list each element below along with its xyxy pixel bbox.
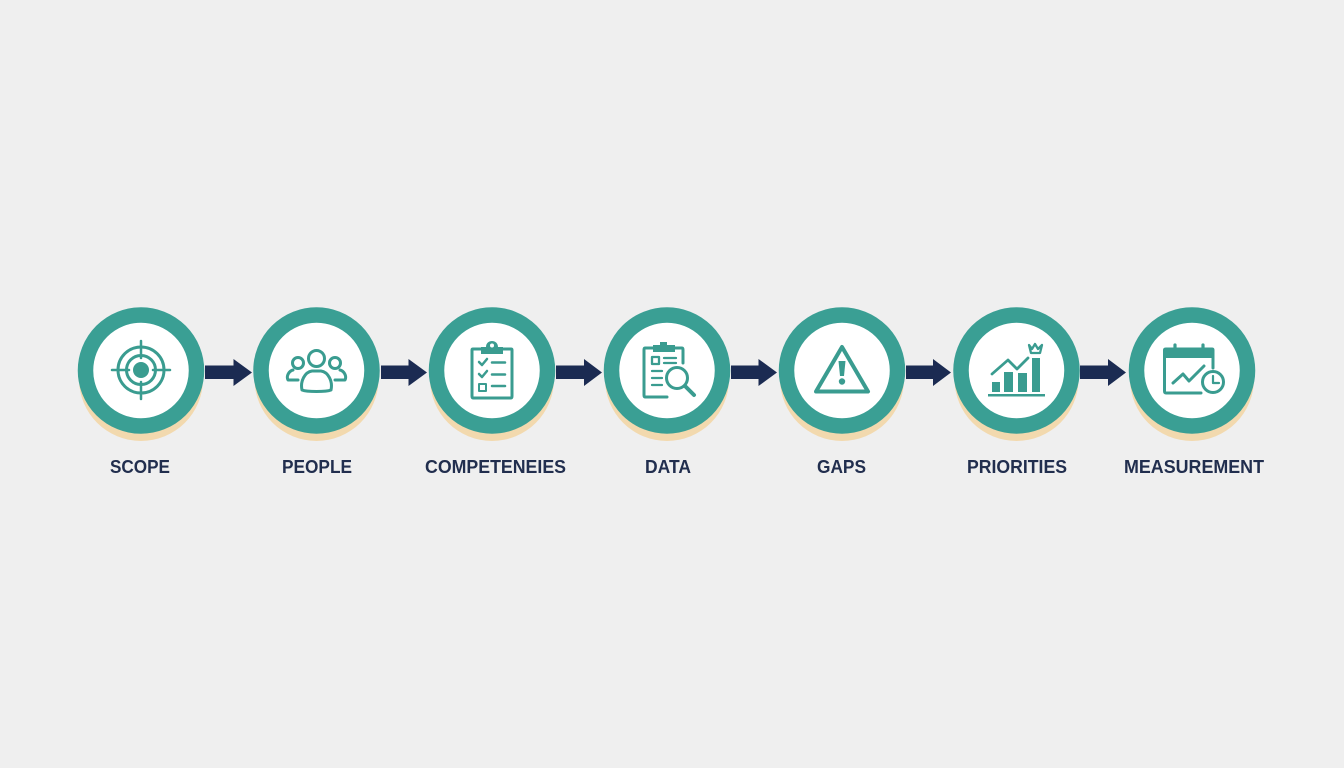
step: measurement xyxy=(1124,315,1264,477)
arrow: competencies to data xyxy=(556,359,602,386)
arrow: priorities to measurement xyxy=(1080,359,1126,386)
label: measurement: MEASUREMENT xyxy=(1124,457,1264,477)
step: priorities xyxy=(954,315,1078,477)
label: priorities: PRIORITIES xyxy=(967,457,1067,477)
arrow: scope to people xyxy=(205,359,252,386)
label: gaps: GAPS xyxy=(817,457,866,477)
arrow: people to competencies xyxy=(381,359,427,386)
arrow: data to gaps xyxy=(731,359,777,386)
step: people xyxy=(254,315,378,477)
icon: warning triangle xyxy=(816,347,868,392)
label: scope: SCOPE xyxy=(110,457,170,477)
label: competencies: COMPETENEIES xyxy=(425,457,566,477)
icon: clipboard checklist xyxy=(472,341,512,398)
label: data: DATA xyxy=(645,457,691,477)
icon: calendar with trend and clock xyxy=(1164,345,1224,393)
step: competencies xyxy=(425,315,566,477)
step: scope xyxy=(79,315,203,477)
icon: report with magnifier xyxy=(644,342,694,397)
step: data xyxy=(605,315,729,477)
arrow: gaps to priorities xyxy=(906,359,951,386)
icon: people xyxy=(287,350,346,392)
icon: target xyxy=(112,341,170,399)
label: people: PEOPLE xyxy=(282,457,352,477)
icon: rising bars with crown xyxy=(988,344,1045,396)
step: gaps xyxy=(780,315,904,477)
